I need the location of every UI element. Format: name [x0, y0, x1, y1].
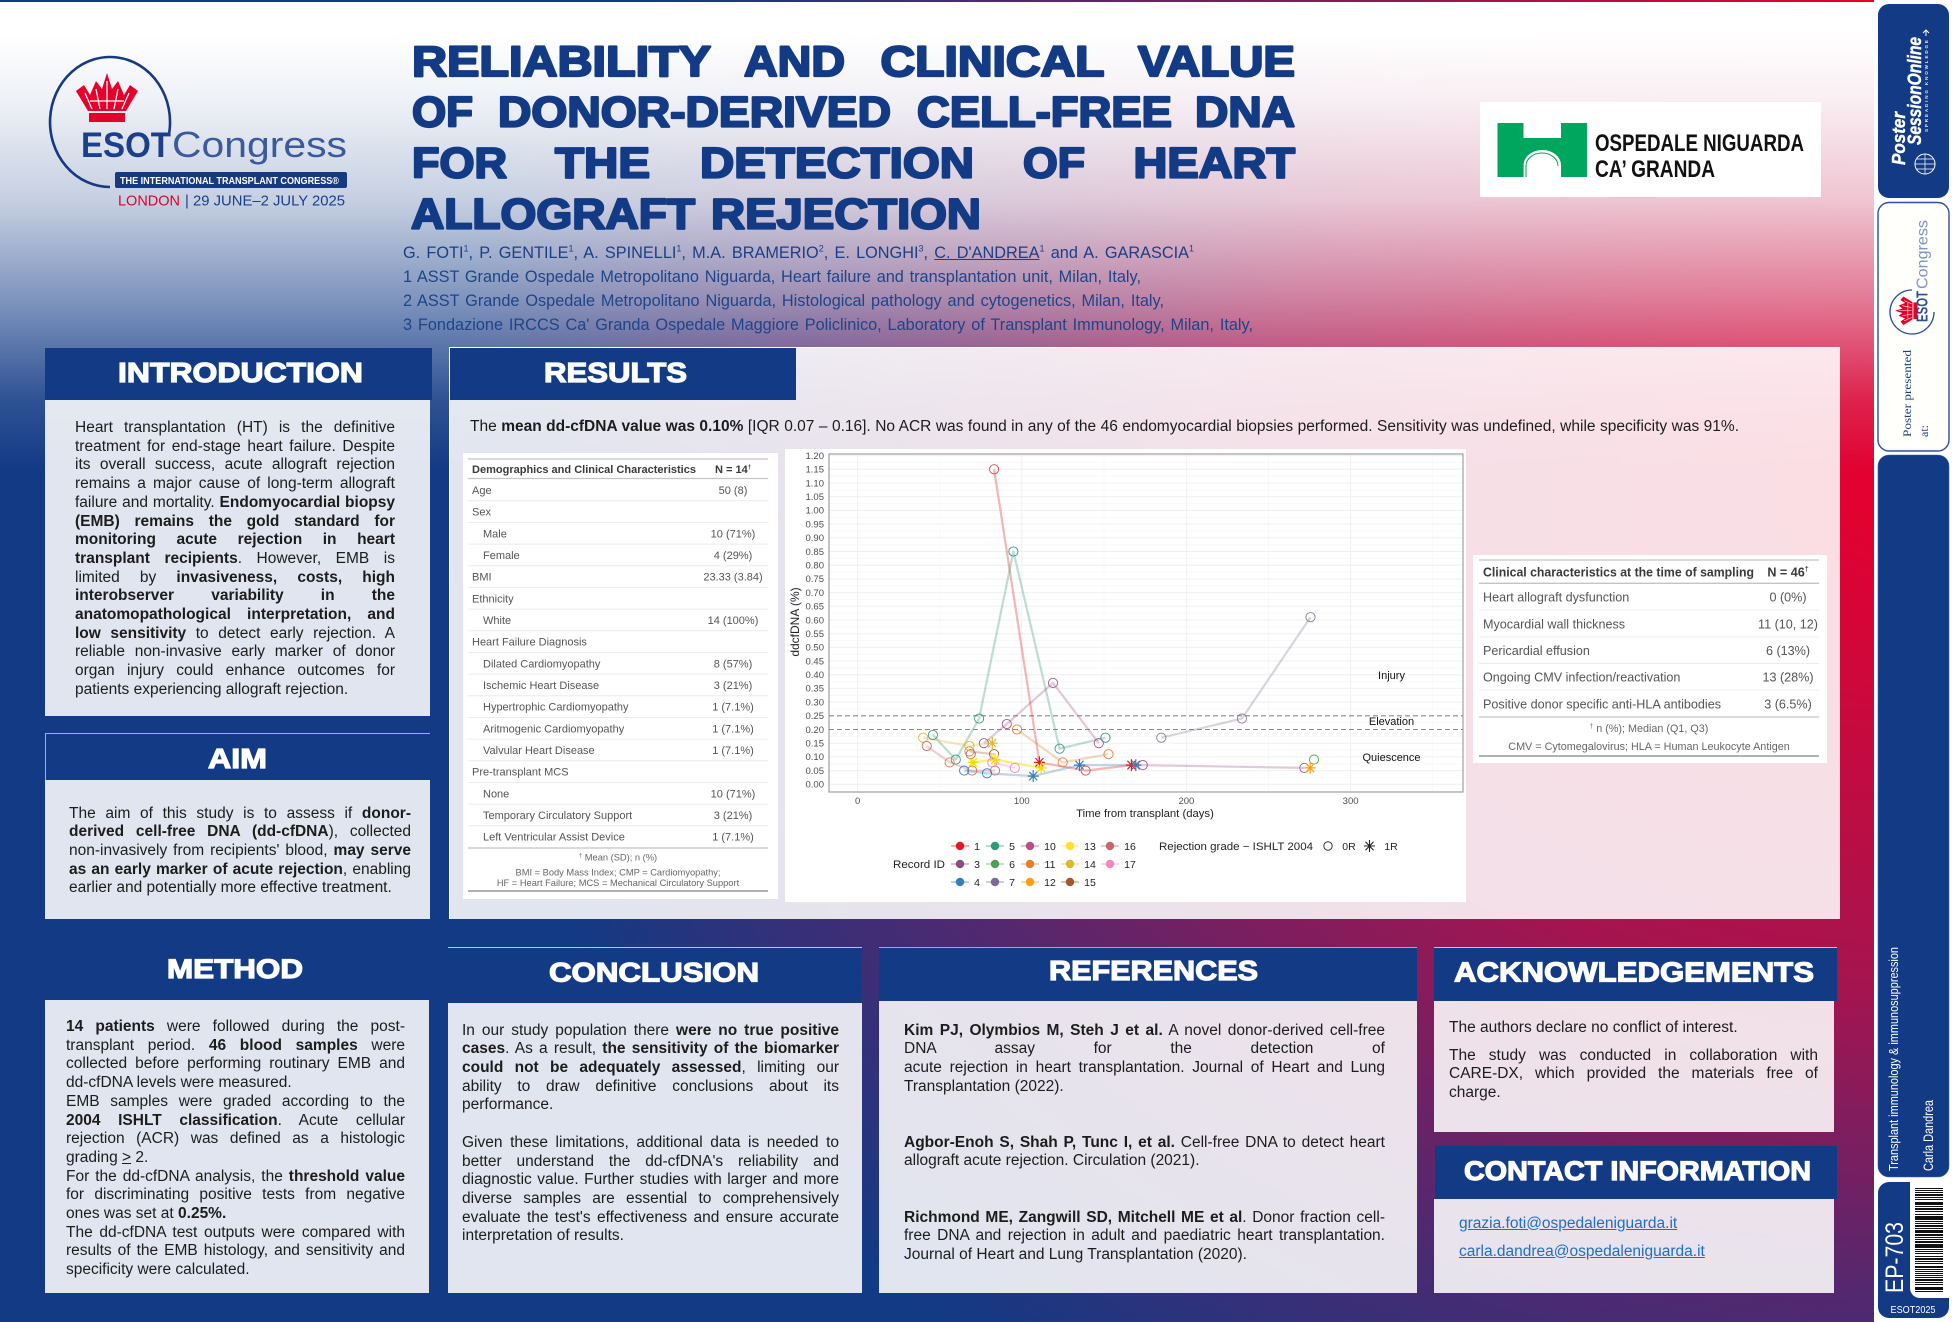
title: OF [1023, 140, 1085, 188]
results panel background [449, 347, 1840, 919]
table: clinical characteristics at sampling: N = 46 [1767, 566, 1805, 580]
panel: results [449, 347, 1840, 919]
title: ALLOGRAFT [411, 192, 695, 238]
conclusion text: evaluate the test's effectiveness and ensure accurate [462, 1209, 839, 1226]
method text: EMB samples were graded according to the [66, 1093, 405, 1110]
panel: contact information [1434, 1146, 1837, 1293]
legend: record id: 3 [974, 859, 980, 871]
zone labels [1362, 670, 1421, 764]
x axis tick labels: 300 [1343, 796, 1359, 807]
acknowledgements text: charge. [1449, 1084, 1501, 1101]
contact text box [1434, 1199, 1834, 1293]
table: demographics and clinical characteristics: 1 (7.1%) [712, 832, 754, 844]
results heading [450, 348, 796, 400]
conclusion text: ability to draw definitive conclusions about its [462, 1078, 839, 1095]
method text: specificity were calculated. [66, 1261, 250, 1278]
table: clinical characteristics at sampling: † [1805, 566, 1809, 574]
introduction text: its overall success, acute allograft rejection [75, 456, 395, 473]
authors and affiliations [403, 244, 1253, 334]
table: demographics and clinical characteristics: Demographics and Clinical Characteristics [472, 464, 696, 476]
logo: ESOT Congress: | 29 JUNE–2 JULY 2025 [185, 192, 345, 210]
affiliation 3: 3 Fondazione IRCCS Ca' Granda Ospedale Maggiore Policlinico, Laboratory of Transplant Immunology, Milan, Italy, [403, 316, 1253, 334]
zone labels: Elevation [1369, 716, 1414, 728]
sidebar: topic and presenter: Carla Dandrea [1921, 1100, 1936, 1171]
legend: record id: 11 [1045, 859, 1056, 871]
y axis tick labels: 0.85 [806, 547, 824, 558]
x axis tick labels: 200 [1178, 796, 1194, 807]
references heading [879, 947, 1417, 1001]
acknowledgements text [1449, 1019, 1818, 1101]
acknowledgements text: The authors declare no conflict of interest. [1449, 1019, 1738, 1036]
table: demographics and clinical characteristics: Mean (SD); n (%) [582, 852, 657, 862]
table: clinical characteristics at sampling: 11 (10, 12) [1758, 618, 1818, 632]
data series lines [923, 469, 1310, 776]
introduction text: anatomopathological interpretation, and [75, 606, 395, 623]
y axis tick labels: 1.20 [806, 451, 824, 462]
chart: dd-cfDNA over time [785, 449, 1466, 902]
sidebar: poster code and barcode: ESOT2025 [1890, 1304, 1936, 1316]
introduction text box [45, 400, 430, 716]
introduction text: (EMB) remains the gold standard for [75, 513, 395, 530]
legend: record id: 12 [1044, 877, 1056, 889]
logo: ESOT Congress: ESOT [81, 126, 171, 165]
legend: record id: Record ID [893, 859, 945, 871]
title: CLINICAL [880, 39, 1104, 86]
table: demographics and clinical characteristics: Female [483, 550, 520, 562]
legend: record id: 15 [1084, 877, 1096, 889]
title: RELIABILITY [412, 39, 711, 86]
sidebar: poster presented at ESOT Congress: ESOT [1914, 291, 1932, 322]
y axis tick labels: 0.15 [806, 738, 824, 750]
sidebar: poster presented at ESOT Congress: at: [1917, 425, 1931, 437]
panel: references [879, 947, 1417, 1293]
legend: record id: 5 [1009, 841, 1015, 853]
y axis tick labels: 0.80 [806, 560, 824, 572]
legend: rejection grade [1159, 840, 1398, 853]
aim text: as an early marker of acute rejection, enabling [69, 861, 411, 878]
zone labels: Quiescence [1362, 752, 1421, 764]
conclusion text: Given these limitations, additional data is needed to [462, 1134, 839, 1151]
logo: Ospedale Niguarda [1480, 102, 1821, 197]
table: demographics and clinical characteristics: 23.33 (3.84) [703, 572, 763, 584]
affiliation 1: 1 ASST Grande Ospedale Metropolitano Niguarda, Heart failure and transplantation unit, Milan, Italy, [403, 268, 1141, 286]
y axis tick labels: 1.10 [806, 478, 824, 489]
title: DNA [1195, 90, 1295, 136]
table: demographics and clinical characteristics: None [483, 788, 509, 800]
title: THE [555, 140, 650, 188]
table: demographics and clinical characteristics: 10 (71%) [711, 788, 755, 800]
table: clinical characteristics at sampling: 3 (6.5%) [1764, 698, 1812, 712]
y axis tick labels: 0.70 [806, 588, 824, 599]
x axis tick labels: 0 [855, 796, 860, 807]
logo: ESOT Congress: THE INTERNATIONAL TRANSPLANT CONGRESS® [120, 176, 340, 187]
sidebar: Poster Session Online badge [1878, 4, 1949, 198]
table: clinical characteristics at sampling: Pericardial effusion [1483, 644, 1590, 658]
sidebar: poster code and barcode: EP-703 [1881, 1222, 1909, 1293]
logo: Ospedale Niguarda: CA’ GRANDA [1595, 156, 1715, 183]
table: demographics and clinical characteristics: † [748, 465, 751, 471]
method text: rejection (ACR) was defined as a histologic [66, 1130, 405, 1147]
sidebar: Poster Session Online badge: SPREADING KNOWLEDGE [1924, 40, 1929, 132]
aim text: non-invasively from recipients' blood, may serve [69, 842, 411, 859]
aim text: earlier and potentially more effective treatment. [69, 879, 392, 896]
method text: results of the EMB histology, and sensitivity and [66, 1242, 405, 1259]
table: demographics and clinical characteristics: 1 (7.1%) [712, 723, 754, 735]
table: demographics and clinical characteristics: 50 (8) [719, 485, 747, 497]
contact email links: grazia.foti@ospedaleniguarda.it [1459, 1214, 1677, 1232]
y axis tick labels: 0.20 [806, 725, 824, 736]
acknowledgements heading: ACKNOWLEDGEMENTS [1454, 956, 1814, 988]
logo: ESOT Congress: Congress [172, 124, 347, 165]
table: demographics and clinical characteristics: BMI [472, 572, 492, 584]
introduction text: patients experiencing allograft rejection. [75, 681, 348, 698]
introduction text: failure and mortality. Endomyocardial biopsy [75, 494, 395, 511]
references text: Transplantation (2022). [904, 1078, 1064, 1095]
method text: dd-cfDNA levels were measured. [66, 1074, 292, 1091]
legend: rejection grade: 0R [1342, 841, 1356, 853]
title: HEART [1134, 140, 1295, 188]
logo: ESOT Congress: LONDON [118, 192, 180, 210]
sidebar: Poster Session Online badge: Poster [1889, 111, 1909, 165]
y axis tick labels: 0.45 [806, 656, 824, 667]
legend: record id: 17 [1124, 859, 1136, 871]
logo arc [50, 57, 170, 187]
x axis title: Time from transplant (days) [1076, 808, 1214, 820]
title: VALUE [1138, 39, 1295, 86]
table: demographics and clinical characteristics: † [579, 854, 582, 860]
title: AND [744, 39, 845, 86]
references text box [879, 1001, 1417, 1293]
table: demographics and clinical characteristics: Ischemic Heart Disease [483, 680, 599, 692]
aim text: derived cell-free DNA (dd-cfDNA), collected [69, 823, 411, 840]
title [411, 39, 1295, 238]
panel: conclusion [448, 947, 862, 1293]
introduction heading [45, 348, 432, 400]
references text: acute rejection in heart transplantation. Journal of Heart and Lung [904, 1059, 1385, 1076]
table: demographics and clinical characteristics: 14 (100%) [708, 615, 758, 627]
title: CELL-FREE [917, 90, 1172, 136]
legend: record id: 6 [1009, 859, 1015, 871]
aim text box [45, 780, 430, 919]
acknowledgements text box [1434, 1001, 1834, 1132]
table: demographics and clinical characteristics: 3 (21%) [714, 680, 752, 692]
legend: record id: 13 [1084, 841, 1096, 853]
table: clinical characteristics at sampling: CMV = Cytomegalovirus; HLA = Human Leukocyte Antigen [1508, 741, 1790, 753]
contact heading [1435, 1146, 1837, 1199]
y axis tick labels [806, 451, 824, 791]
references text: Richmond ME, Zangwill SD, Mitchell ME et al. Donor fraction cell- [904, 1209, 1385, 1226]
table: demographics and clinical characteristics: BMI = Body Mass Index; CMP = Cardiomyopathy; [516, 868, 720, 878]
table: demographics and clinical characteristics: HF = Heart Failure; MCS = Mechanical Circulatory Support [497, 878, 740, 888]
table: clinical characteristics at sampling: Positive donor specific anti-HLA antibodies [1483, 698, 1721, 712]
table: demographics and clinical characteristics: Hypertrophic Cardiomyopathy [483, 702, 629, 714]
panel: introduction [45, 348, 432, 716]
y axis tick labels: 0.95 [806, 519, 824, 530]
table: demographics and clinical characteristics: Heart Failure Diagnosis [472, 637, 587, 649]
threshold lines [829, 716, 1463, 730]
table: clinical characteristics at sampling: Myocardial wall thickness [1483, 618, 1625, 632]
table: demographics and clinical characteristics: 3 (21%) [714, 810, 752, 822]
legend: record id: 14 [1084, 859, 1096, 871]
acknowledgements heading [1434, 947, 1837, 1001]
legend: record id: 10 [1044, 841, 1056, 853]
legend: record id [893, 841, 1136, 889]
table: demographics and clinical characteristics: 4 (29%) [714, 550, 752, 562]
aim text: The aim of this study is to assess if donor- [69, 805, 411, 822]
method text: collected before performing routinary EMB and [66, 1055, 405, 1072]
acknowledgements text: The study was conducted in collaboration with [1449, 1047, 1818, 1064]
logo crown [76, 73, 138, 122]
y axis tick labels: 1.00 [806, 506, 824, 517]
legend: rejection grade: Rejection grade − ISHLT 2004 [1159, 841, 1313, 853]
aim text [69, 805, 411, 896]
table: demographics and clinical characteristics: 1 (7.1%) [712, 745, 754, 757]
references heading: REFERENCES [1049, 955, 1258, 986]
conclusion text: diverse samples are essential to comprehensively [462, 1190, 839, 1207]
table: clinical characteristics at sampling: 0 (0%) [1769, 590, 1807, 604]
contact email links [1459, 1214, 1705, 1260]
y axis tick labels: 0.65 [806, 602, 824, 613]
y axis tick labels: 0.25 [806, 711, 824, 722]
logo: Ospedale Niguarda: OSPEDALE NIGUARDA [1595, 130, 1804, 157]
legend: record id: 7 [1009, 877, 1015, 889]
introduction text: organ injury could enhance outcomes for [75, 662, 395, 679]
introduction text: interobserver variability in the [75, 587, 395, 604]
title: DETECTION [700, 140, 974, 188]
references text: free DNA and rejection in adult and paediatric heart transplantation. [904, 1227, 1385, 1244]
method text: for discriminating positive tests from negative [66, 1186, 405, 1203]
table: clinical characteristics at sampling: Ongoing CMV infection/reactivation [1483, 670, 1680, 684]
table: demographics and clinical characteristics: Ethnicity [472, 593, 514, 605]
table: demographics and clinical characteristics: N = 14 [715, 464, 748, 476]
sidebar: Poster Session Online badge: SessionOnline [1905, 37, 1926, 145]
title: OF [412, 90, 473, 136]
references text [904, 1022, 1385, 1263]
method heading: METHOD [167, 954, 303, 984]
method text: The dd-cfDNA test outputs were compared with [66, 1224, 405, 1241]
table: demographics and clinical characteristics: White [483, 615, 511, 627]
table: clinical characteristics at sampling: n (%); Median (Q1, Q3) [1593, 723, 1708, 735]
conclusion text box [448, 1003, 862, 1293]
y axis tick labels: 0.35 [806, 684, 824, 695]
y axis tick labels: 0.75 [806, 574, 824, 585]
y axis tick labels: 0.50 [806, 643, 824, 654]
sidebar: poster code and barcode [1878, 1182, 1950, 1318]
conclusion text: In our study population there were no true positive [462, 1022, 839, 1039]
table: demographics and clinical characteristics: Dilated Cardiomyopathy [483, 658, 601, 670]
zone labels: Injury [1378, 670, 1405, 682]
y axis tick labels: 0.05 [806, 766, 824, 777]
references text: Kim PJ, Olymbios M, Steh J et al. A novel donor-derived cell-free [904, 1022, 1385, 1039]
y axis tick labels: 1.15 [806, 465, 824, 476]
references text: Journal of Heart and Lung Transplantation (2020). [904, 1246, 1247, 1263]
y axis tick labels: 0.55 [806, 629, 824, 640]
results summary sentence: The mean dd-cfDNA value was 0.10% [IQR 0.07 – 0.16]. No ACR was found in any of the 46 endomyocardial biopsies performed. Sensitivity was undefined, while specificity was 91%. [470, 418, 1739, 435]
table: clinical characteristics at sampling: 13 (28%) [1762, 670, 1814, 684]
conclusion heading: CONCLUSION [549, 958, 759, 988]
barcode [1915, 1188, 1943, 1293]
sidebar: poster presented at ESOT Congress: Poster presented [1900, 350, 1914, 437]
title: FOR [412, 140, 507, 188]
y axis tick labels: 1.05 [806, 492, 824, 503]
results heading: RESULTS [544, 357, 687, 388]
logo: ESOT Congress [50, 57, 347, 210]
references text: allograft acute rejection. Circulation (2021). [904, 1152, 1200, 1169]
x axis tick labels: 100 [1014, 796, 1030, 807]
method text box [45, 1000, 429, 1293]
table: demographics and clinical characteristics: Aritmogenic Cardiomyopathy [483, 723, 625, 735]
table: demographics and clinical characteristics: 10 (71%) [711, 528, 755, 540]
table: demographics and clinical characteristics: Age [472, 485, 492, 497]
conclusion heading [448, 947, 862, 1003]
method text: For the dd-cfDNA analysis, the threshold value [66, 1168, 405, 1185]
title: DONOR-DERIVED [498, 90, 891, 136]
y axis tick labels: 0.00 [806, 780, 824, 791]
legend: rejection grade: 1R [1384, 841, 1398, 853]
legend: record id: 16 [1124, 841, 1136, 853]
y axis title: ddcfDNA (%) [788, 587, 802, 657]
sidebar: topic and presenter [1878, 455, 1949, 1177]
conclusion text [462, 1022, 839, 1244]
author list: G. FOTI1, P. GENTILE1, A. SPINELLI1, M.A. BRAMERIO2, E. LONGHI3, C. D'ANDREA1 and A. GARASCIA1 [403, 244, 1194, 262]
introduction text: transplant recipients. However, EMB is [75, 550, 395, 567]
method text: 2004 ISHLT classification. Acute cellular [66, 1112, 405, 1129]
contact email links: carla.dandrea@ospedaleniguarda.it [1459, 1242, 1705, 1260]
method text [66, 1018, 405, 1278]
panel: acknowledgements [1434, 947, 1837, 1132]
table: demographics and clinical characteristics: Left Ventricular Assist Device [483, 832, 625, 844]
table: clinical characteristics at sampling: Clinical characteristics at the time of sampling [1483, 566, 1754, 580]
conclusion text: could not be adequately assessed, limiting our [462, 1059, 839, 1076]
conclusion text: diagnostic value. Further studies with larger and more [462, 1171, 839, 1188]
top accent strip [0, 0, 1874, 2]
method text: 14 patients were followed during the post- [66, 1018, 405, 1035]
introduction text [75, 419, 395, 698]
introduction text: reliable non-invasive early marker of donor [75, 643, 395, 660]
acknowledgements text: CARE-DX, which provided the materials free of [1449, 1065, 1818, 1082]
conclusion text: performance. [462, 1096, 553, 1113]
panel: aim [45, 733, 430, 919]
table: clinical characteristics at sampling: † [1590, 723, 1594, 730]
affiliation 2: 2 ASST Grande Ospedale Metropolitano Niguarda, Histological pathology and cytogenetics, Milan, Italy, [403, 292, 1164, 310]
aim heading [45, 733, 430, 780]
introduction text: monitoring acute rejection in heart [75, 531, 395, 548]
panel: method [45, 954, 429, 1293]
introduction text: treatment for end-stage heart failure. Despite [75, 438, 395, 455]
method text: ones was set at 0.25%. [66, 1205, 226, 1222]
title: REJECTION [711, 192, 981, 238]
y axis tick labels: 0.30 [806, 697, 824, 708]
conclusion text: interpretation of results. [462, 1227, 624, 1244]
data point markers [919, 465, 1319, 782]
contact heading: CONTACT INFORMATION [1464, 1156, 1811, 1186]
table: demographics and clinical characteristics: Valvular Heart Disease [483, 745, 595, 757]
table: clinical characteristics at sampling: Heart allograft dysfunction [1483, 590, 1629, 604]
legend: record id: 4 [974, 877, 980, 889]
table: demographics and clinical characteristics: Sex [472, 507, 491, 519]
introduction text: low sensitivity to detect early rejection. A [75, 625, 395, 642]
y axis tick labels: 0.60 [806, 615, 824, 626]
y axis tick labels: 0.40 [806, 670, 824, 681]
x axis tick labels [855, 796, 1359, 807]
references text: DNA assay for the detection of [904, 1040, 1385, 1057]
table: demographics and clinical characteristics: 8 (57%) [714, 658, 752, 670]
introduction text: limited by invasiveness, costs, high [75, 569, 395, 586]
introduction text: remains a major cause of long-term allograft [75, 475, 395, 492]
legend: record id: 1 [974, 841, 980, 853]
aim heading: AIM [208, 743, 267, 774]
sidebar: topic and presenter: Transplant immunology & immunosuppression [1886, 947, 1901, 1171]
y axis tick labels: 0.10 [806, 752, 824, 763]
method text: transplant period. 46 blood samples were [66, 1037, 405, 1054]
introduction text: Heart transplantation (HT) is the definitive [75, 419, 395, 436]
table: demographics and clinical characteristics: Male [483, 528, 507, 540]
sidebar: poster presented at ESOT Congress: Congress [1914, 220, 1932, 289]
table: demographics and clinical characteristics [463, 453, 778, 899]
table: demographics and clinical characteristics: Temporary Circulatory Support [483, 810, 632, 822]
references text: Agbor-Enoh S, Shah P, Tunc I, et al. Cell-free DNA to detect heart [904, 1134, 1385, 1151]
table: clinical characteristics at sampling: 6 (13%) [1766, 644, 1810, 658]
conclusion text: better understand the dd-cfDNA's reliability and [462, 1152, 839, 1170]
table: clinical characteristics at sampling [1473, 555, 1827, 763]
introduction heading: INTRODUCTION [118, 357, 363, 388]
table: demographics and clinical characteristics: 1 (7.1%) [712, 702, 754, 714]
y axis tick labels: 0.90 [806, 533, 824, 544]
conclusion text: cases. As a result, the sensitivity of the biomarker [462, 1040, 839, 1057]
method text: grading > 2. [66, 1149, 148, 1166]
sidebar: poster presented at ESOT Congress [1878, 202, 1949, 451]
table: demographics and clinical characteristics: Pre-transplant MCS [472, 767, 569, 779]
